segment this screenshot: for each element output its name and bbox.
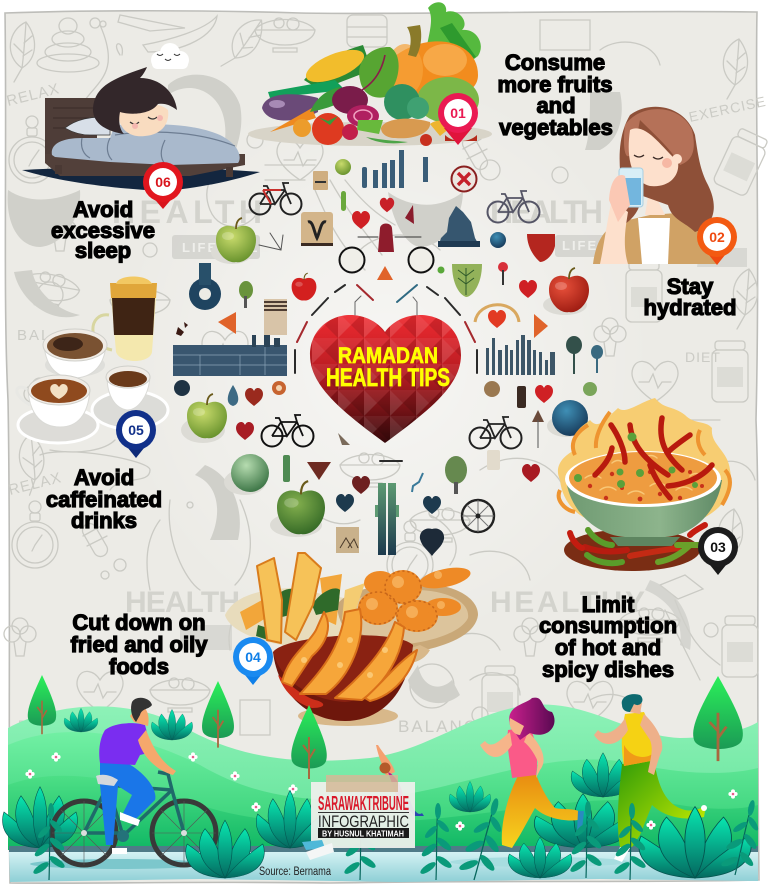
pin 01: [438, 93, 478, 145]
icon: sleep bubble: [151, 43, 189, 69]
heading: tip 3: [539, 592, 677, 682]
heading: tip 6: [51, 197, 155, 263]
jogger: man: [594, 694, 707, 862]
heading: tip 5: caffeinated: [46, 487, 162, 512]
heading: tip 2: Stay: [667, 274, 714, 299]
scattered icons: boxes, rings and trees: [176, 166, 603, 553]
pin 03: 03: [710, 539, 726, 555]
flowers: [25, 752, 738, 831]
heading: tip 1: and: [536, 93, 576, 118]
watermark words: BALANCE: [18, 717, 90, 733]
illustration: woman drinking water: [593, 107, 716, 264]
scattered icons: bicycles: [250, 183, 540, 532]
park scene: hills and road: [8, 705, 758, 882]
foreground plants: [32, 793, 768, 885]
watermark words: RELAX: [7, 469, 64, 499]
heading: tip 6: sleep: [75, 238, 131, 263]
pin 01: 01: [450, 105, 466, 121]
heading: tip 3: spicy dishes: [542, 657, 674, 682]
heading: tip 4: Cut down on: [72, 610, 206, 635]
watermark words: HEALTH: [125, 586, 240, 619]
watermark words: BAL: [17, 327, 51, 344]
watermark words: HEALTH: [490, 194, 603, 230]
heading: tip 1: Consume: [505, 50, 605, 75]
heading: tip 5: drinks: [71, 508, 137, 533]
plants: [3, 708, 635, 848]
heading: tip 3: consumption: [539, 613, 677, 638]
heading: tip 1: vegetables: [499, 115, 613, 140]
pin 02: [697, 217, 737, 265]
watermark words: [5, 80, 768, 736]
heading: tip 6: Avoid: [73, 197, 133, 222]
illustration: fruits and vegetables: [248, 2, 492, 146]
watermark words: LIFE: [562, 238, 598, 253]
heading: tip 4: [71, 610, 208, 679]
logo card: INFOGRAPHIC: [318, 812, 409, 831]
heading: tip 1: more fruits: [498, 72, 612, 97]
pin 04: [233, 637, 273, 685]
center heart: [310, 315, 461, 443]
clock ticks around heart: [259, 233, 477, 461]
pin 06: [143, 162, 183, 209]
watermark words: HEALTH: [112, 194, 262, 230]
title: RAMADAN: [338, 343, 438, 368]
logo card: BY HUSNUL KHATIMAH: [322, 830, 404, 838]
illustration: fried foods: [225, 553, 478, 726]
trees: [28, 675, 743, 779]
heading: tip 3: Limit: [582, 592, 635, 617]
illustration: coffee cups: [17, 276, 168, 443]
watermark words: EXERCISE: [687, 93, 768, 125]
watermark words: DIET: [685, 349, 721, 365]
heading: tip 5: Avoid: [74, 465, 134, 490]
pin 03: [698, 527, 738, 575]
scattered icons: apples and spheres: [174, 159, 597, 537]
pin 04: 04: [245, 649, 261, 665]
jogger: woman: [480, 698, 584, 848]
centre glow: [115, 70, 655, 650]
scattered icons: bar charts and panels: [173, 150, 555, 555]
watermark words: HEALTHY: [490, 586, 645, 619]
watermark words: RELAX: [5, 80, 62, 110]
illustration: spicy dish: [558, 398, 731, 571]
heading: tip 5: [46, 465, 162, 533]
watermark words: BALANCE: [398, 717, 491, 736]
heading: tip 2: [644, 274, 736, 320]
illustration: sleeping person in bed: [22, 67, 260, 191]
pin 05: [116, 410, 156, 458]
heading: tip 6: excessive: [51, 218, 155, 243]
cyclist: [52, 698, 216, 865]
heading: tip 2: hydrated: [644, 295, 736, 320]
source credit: Source: Bernama: [259, 866, 331, 878]
heading: tip 4: fried and oily: [71, 632, 208, 657]
heading: tip 4: foods: [109, 654, 169, 679]
title: [326, 343, 450, 392]
scattered icons: hearts: [236, 198, 553, 556]
large grey doodle shapes: [8, 75, 747, 703]
logo card: [302, 775, 415, 860]
heading: tip 1: [498, 50, 613, 140]
pin 05: 05: [128, 422, 144, 438]
pin 06: 06: [155, 174, 171, 190]
pin 02: 02: [709, 229, 725, 245]
small figure behind logo: [376, 745, 424, 820]
watermark words: LIFESTYLE: [182, 240, 270, 255]
title: HEALTH TIPS: [326, 364, 450, 392]
heading: tip 3: of hot and: [555, 635, 661, 660]
logo card: SARAWAKTRIBUNE: [318, 793, 409, 815]
